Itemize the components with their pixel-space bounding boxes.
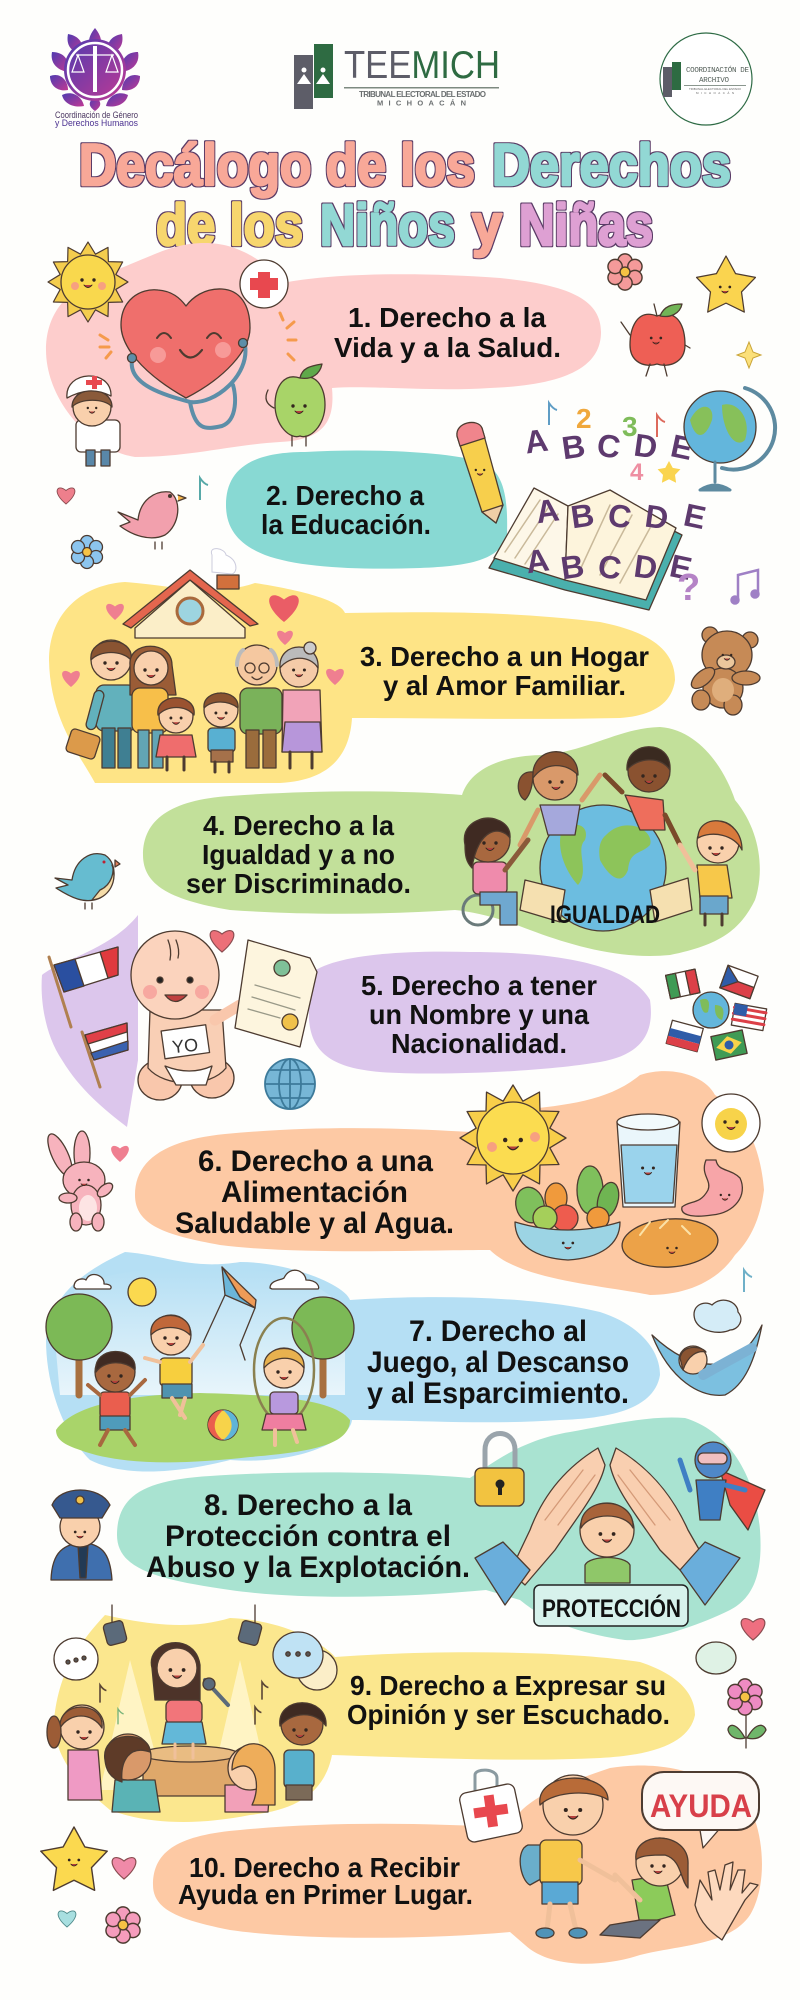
kid left xyxy=(47,1705,104,1800)
blob: purple pill xyxy=(309,952,651,1074)
text: derecho 2 xyxy=(261,480,431,540)
text: derecho 8: Abuso y la Explotación. xyxy=(146,1551,470,1584)
title: y xyxy=(472,193,502,258)
blob: mint background xyxy=(117,1417,761,1640)
icon: AYUDA speech bubble: AYUDA xyxy=(650,1788,752,1824)
bag xyxy=(65,728,101,760)
ball xyxy=(208,1410,238,1440)
kite xyxy=(202,1267,256,1360)
text: derecho 10 xyxy=(178,1852,473,1910)
icon: heart xyxy=(741,1619,765,1640)
text: derecho 5 xyxy=(361,970,597,1059)
icon: open book xyxy=(489,488,682,610)
logo: TEEMICH xyxy=(294,44,500,109)
blob: yellow background xyxy=(49,582,675,783)
blob: peach background xyxy=(135,1071,764,1295)
sky glow xyxy=(55,1269,345,1395)
boy xyxy=(204,693,238,772)
icon: letters and numbers: D xyxy=(643,498,671,537)
illustration: park xyxy=(46,1267,354,1462)
kid front xyxy=(105,1734,160,1812)
logo: Coordinación de Archivo xyxy=(660,33,752,125)
icon: glass of water xyxy=(617,1114,680,1207)
girl with rope xyxy=(254,1318,314,1445)
text: derecho 8: 8. Derecho a la xyxy=(204,1489,412,1522)
label box: PROTECCIÓN: PROTECCIÓN xyxy=(542,1593,681,1623)
singer xyxy=(151,1643,228,1758)
icon: speech bubble white xyxy=(54,1638,98,1680)
text: derecho 9 xyxy=(347,1670,670,1730)
trees xyxy=(46,1294,354,1395)
icon: nurse xyxy=(67,376,120,466)
cloud right xyxy=(270,1270,319,1289)
illustration: family xyxy=(65,640,322,772)
text: derecho 7: y al Esparcimiento. xyxy=(367,1377,629,1410)
icon: heart xyxy=(111,1146,129,1162)
grass xyxy=(56,1393,350,1462)
icon: pink bird xyxy=(118,492,186,549)
icon: pink heart xyxy=(112,1858,136,1879)
icon: first aid kit xyxy=(458,1770,524,1843)
icon: globe on stand xyxy=(684,388,775,490)
icon: pink flower xyxy=(608,254,642,290)
text: derecho 1: 1. Derecho a la xyxy=(348,302,546,333)
icon: letters and numbers: E xyxy=(681,497,709,536)
blob: pink background xyxy=(46,243,601,457)
icon: smiling star xyxy=(697,256,755,312)
icon: smile bubble xyxy=(702,1094,760,1152)
logo: Coordinación de Género y Derechos Humanos: Coordinación de Género xyxy=(55,110,138,121)
icon: medical cross bubble xyxy=(240,260,288,308)
panel: derecho 8 protección xyxy=(51,1417,765,1640)
text: derecho 2: 2. Derecho a xyxy=(266,480,424,511)
logo: Coordinación de Género y Derechos Humanos xyxy=(50,28,140,129)
icon: smiling star xyxy=(41,1827,107,1890)
icon: letters and numbers: B xyxy=(558,547,586,586)
icon: letters and numbers: B xyxy=(559,427,587,466)
icon: flower with stem xyxy=(728,1679,766,1748)
logo: Coordinación de Archivo: ARCHIVO xyxy=(699,77,729,85)
text: derecho 7: Juego, al Descanso xyxy=(367,1346,629,1379)
icon: hearts xyxy=(62,595,344,687)
icon: letters and numbers: A xyxy=(523,541,551,580)
icon: letters and numbers: C xyxy=(596,548,624,587)
logo: Coordinación de Archivo: MICHOACÁN xyxy=(696,91,734,95)
icon: letters and numbers: 4 xyxy=(630,459,644,486)
kid right front xyxy=(225,1744,275,1812)
text: derecho 4 xyxy=(186,810,411,899)
icon: bread xyxy=(620,1216,720,1270)
icon: music notes xyxy=(100,1682,268,1725)
icon: letters and numbers: 2 xyxy=(576,403,592,434)
kid right xyxy=(280,1703,326,1800)
title: Decálogo de los xyxy=(79,133,475,198)
panel: derecho 9 opinión xyxy=(47,1605,766,1822)
icon: decorative heart xyxy=(57,488,75,504)
text: derecho 5: 5. Derecho a tener xyxy=(361,970,597,1001)
text: derecho 1 xyxy=(334,302,561,363)
boy left xyxy=(88,1351,145,1445)
panel: derecho 1 vida y salud xyxy=(46,242,761,466)
text: derecho 6: Saludable y al Agua. xyxy=(175,1207,454,1240)
cloud left xyxy=(74,1274,111,1289)
icon: music note teal xyxy=(200,478,208,500)
boy middle xyxy=(145,1315,203,1418)
icon: waving hand xyxy=(695,1862,758,1940)
sun small xyxy=(128,1278,156,1306)
logo: TEEMICH: TRIBUNAL ELECTORAL DEL ESTADO xyxy=(359,90,486,99)
blob: purple wedge xyxy=(42,915,138,1127)
illustration: singer on stage xyxy=(47,1643,326,1812)
blob: peach background xyxy=(153,1766,762,1964)
icon: pink bunny xyxy=(43,1131,115,1231)
icon: music note lilac xyxy=(732,570,758,604)
icon: letters and numbers: A xyxy=(533,491,561,530)
icon: letters and numbers: E xyxy=(668,427,696,467)
dad xyxy=(85,640,136,768)
icon: letters and numbers: B xyxy=(568,496,596,535)
blob: green background xyxy=(143,727,760,956)
text: derecho 3: 3. Derecho a un Hogar xyxy=(360,641,649,672)
icon: pink flower xyxy=(106,1907,140,1943)
icon: pale speech bubble xyxy=(696,1642,736,1674)
panel: derecho 2 educación xyxy=(57,388,775,610)
icon: spotlights xyxy=(100,1605,270,1790)
icon: salad bowl xyxy=(512,1166,622,1260)
text: derecho 3 xyxy=(360,641,649,701)
text: derecho 8: Protección contra el xyxy=(165,1520,451,1553)
icon: speech bubble blue xyxy=(273,1632,323,1678)
text: derecho 4: ser Discriminado. xyxy=(186,868,411,899)
icon: boy helping xyxy=(520,1775,615,1938)
icon: wire globe xyxy=(265,1059,315,1109)
icon: letters and numbers: D xyxy=(632,548,660,587)
icon: letters and numbers: D xyxy=(632,427,660,466)
girl in wheelchair xyxy=(463,818,528,925)
label: IGUALDAD: IGUALDAD xyxy=(550,901,660,929)
text: derecho 5: un Nombre y una xyxy=(369,999,589,1030)
panel: derecho 3 hogar xyxy=(49,549,760,783)
panel: derecho 6 alimentación xyxy=(43,1071,764,1295)
icon: sparkle star xyxy=(737,342,761,368)
icon: chimney smoke xyxy=(211,549,236,574)
girl top-left xyxy=(518,752,600,845)
icon: music note xyxy=(744,1270,752,1292)
icon: letters and numbers xyxy=(522,403,709,587)
title: Derechos xyxy=(492,133,731,198)
icon: blue bird xyxy=(55,854,120,909)
icon: pencil xyxy=(457,422,503,523)
blob: light blue background xyxy=(46,1252,660,1472)
text: derecho 1: Vida y a la Salud. xyxy=(334,332,561,363)
icon: speech bubble cream xyxy=(297,1650,337,1690)
icon: child xyxy=(580,1503,634,1583)
icon: stomach xyxy=(682,1160,742,1216)
grandpa xyxy=(237,645,282,768)
title: Niñas xyxy=(519,193,653,258)
boy top-right xyxy=(605,747,680,845)
boy right xyxy=(680,821,742,925)
icon: France flag xyxy=(49,947,118,1027)
text: derecho 2: la Educación. xyxy=(261,509,431,540)
panel: derecho 4 igualdad xyxy=(55,727,760,956)
icon: hammock xyxy=(652,1325,762,1395)
icon: house xyxy=(123,570,258,638)
icon: question mark: ? xyxy=(677,567,700,609)
logo: Coordinación de Archivo: COORDINACIÓN DE xyxy=(686,65,749,75)
icon: sparks xyxy=(100,313,296,360)
logo: Coordinación de Género y Derechos Humanos: y Derechos Humanos xyxy=(55,118,138,129)
icon: certificate xyxy=(235,940,317,1047)
text: derecho 10: 10. Derecho a Recibir xyxy=(189,1852,460,1883)
icon: police officer xyxy=(51,1490,112,1580)
logo: Coordinación de Archivo: TRIBUNAL ELECTORAL DEL ESTADO xyxy=(689,87,742,91)
icon: Netherlands flag xyxy=(82,1023,128,1087)
icon: heart with stethoscope xyxy=(121,289,250,428)
text: derecho 9: 9. Derecho a Expresar su xyxy=(350,1670,666,1701)
text: derecho 7 xyxy=(367,1315,629,1410)
icon: green apple xyxy=(266,364,325,446)
icon: red apple xyxy=(621,304,690,376)
blob: pale yellow background xyxy=(54,1615,695,1822)
text: derecho 4: Igualdad y a no xyxy=(202,839,395,870)
text: derecho 5: Nacionalidad. xyxy=(391,1028,567,1059)
icon: letters and numbers: E xyxy=(667,547,695,587)
text: derecho 8 xyxy=(146,1489,470,1584)
icon: letters and numbers: A xyxy=(522,422,550,461)
blob: teal background xyxy=(226,450,507,569)
icon: blue flower xyxy=(72,536,102,568)
text: derecho 9: Opinión y ser Escuchado. xyxy=(347,1699,670,1730)
title: Niños xyxy=(320,193,455,258)
icon: teddy bear xyxy=(688,627,760,715)
icon: protecting hands xyxy=(475,1448,740,1605)
label box: PROTECCIÓN xyxy=(534,1585,688,1626)
text: derecho 6: Alimentación xyxy=(221,1176,408,1209)
icon: sun xyxy=(48,242,128,322)
title: de los xyxy=(156,193,303,258)
icon: sleep cloud xyxy=(694,1300,741,1332)
text: derecho 6 xyxy=(175,1145,454,1240)
icon: teal heart xyxy=(58,1911,76,1927)
icon: world flags xyxy=(666,965,767,1060)
text: derecho 3: y al Amor Familiar. xyxy=(383,670,626,701)
panel: derecho 10 ayuda xyxy=(41,1766,762,1964)
text: derecho 6: 6. Derecho a una xyxy=(198,1145,433,1178)
title xyxy=(79,133,731,258)
panel: derecho 5 nombre y nacionalidad xyxy=(42,915,767,1127)
grandma xyxy=(280,642,322,768)
icon: letters and numbers: C xyxy=(595,427,623,466)
icon: letters and numbers: C xyxy=(606,497,634,536)
icon: banner xyxy=(520,878,692,922)
logo: TEEMICH: MICHOACÁN xyxy=(377,98,466,108)
illustration: children holding hands xyxy=(463,747,742,925)
icon: sun xyxy=(460,1085,566,1191)
text: derecho 10: Ayuda en Primer Lugar. xyxy=(178,1879,473,1910)
icon: letters and numbers: 3 xyxy=(622,411,638,442)
icon: hero xyxy=(680,1442,765,1530)
text: derecho 4: 4. Derecho a la xyxy=(203,810,394,841)
girl xyxy=(156,698,196,770)
icon: AYUDA speech bubble xyxy=(642,1772,759,1848)
icon: sitting girl xyxy=(600,1838,688,1938)
icon: heart xyxy=(210,931,234,952)
label: YO: YO xyxy=(171,1035,199,1057)
stage xyxy=(142,1746,240,1796)
logo: TEEMICH: TEEMICH xyxy=(344,44,500,87)
icon: padlock xyxy=(475,1434,524,1506)
icon: baby with YO sign xyxy=(131,931,240,1100)
mom xyxy=(130,646,176,768)
panel: derecho 7 juego xyxy=(46,1252,762,1472)
text: derecho 7: 7. Derecho al xyxy=(409,1315,587,1348)
icon: earth globe xyxy=(540,805,666,931)
